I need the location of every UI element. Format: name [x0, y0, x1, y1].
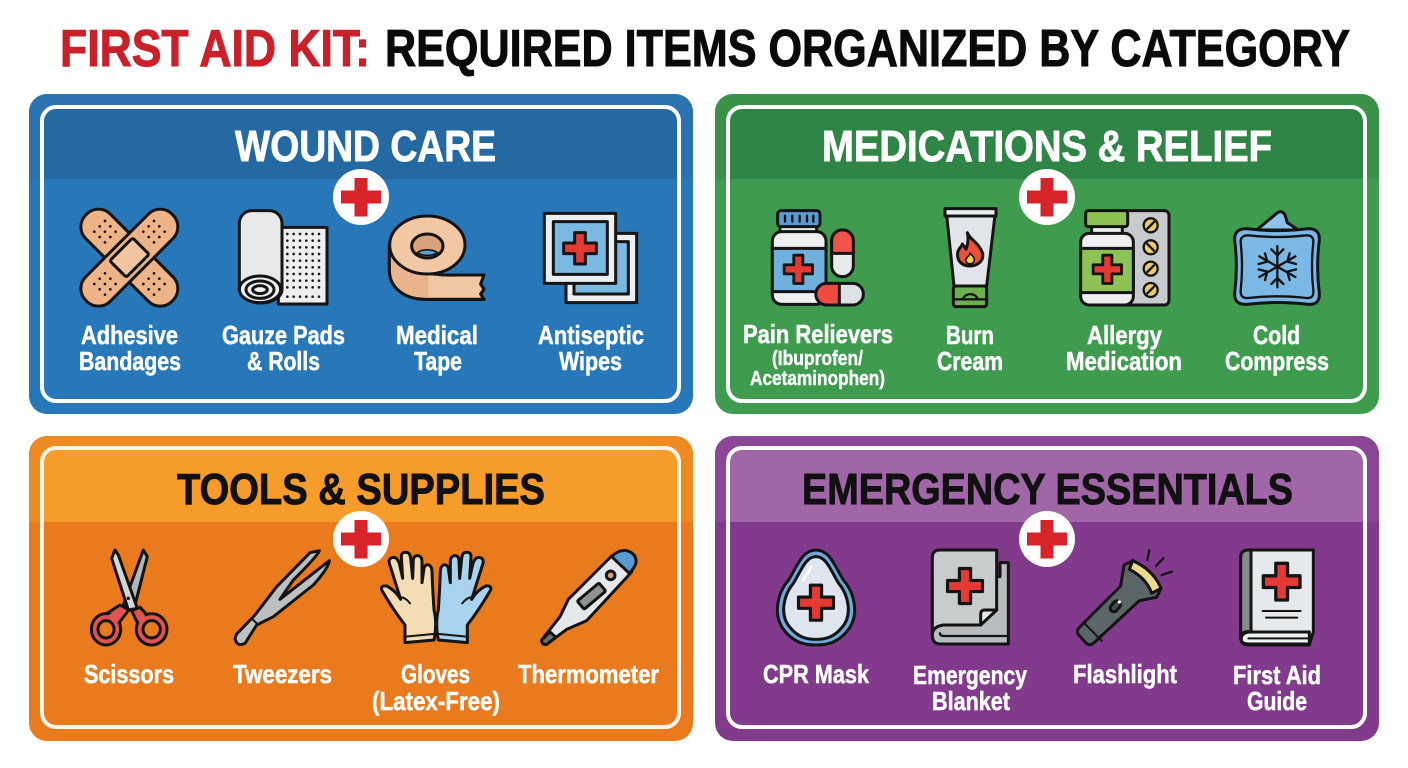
label: emergency blanket: Emergency	[913, 660, 1027, 690]
label: antiseptic wipes: Wipes	[559, 346, 622, 376]
icon: cpr mask	[777, 550, 855, 645]
label: cold compress: Cold	[1253, 320, 1300, 350]
label: burn cream	[937, 320, 1003, 376]
panel: tools and supplies	[29, 436, 693, 741]
label: gauze pads and rolls	[222, 320, 345, 376]
label: burn cream: Burn	[946, 320, 994, 350]
icon: scissors	[91, 550, 167, 645]
label: antiseptic wipes: Antiseptic	[538, 320, 644, 350]
icon: antiseptic wipes	[544, 213, 637, 303]
icon: tweezers	[235, 551, 329, 645]
icon: red cross badge	[333, 169, 389, 225]
icon: burn cream	[945, 209, 996, 307]
label: first aid guide	[1233, 660, 1321, 716]
heading: wound care: WOUND CARE	[235, 122, 496, 171]
icon: pain relievers	[772, 211, 863, 305]
icon: adhesive bandages	[74, 202, 185, 313]
label: emergency blanket	[913, 660, 1027, 716]
icon: flashlight	[1077, 550, 1172, 645]
heading: tools and supplies: TOOLS & SUPPLIES	[177, 465, 545, 514]
label: pain relievers: Pain Relievers	[743, 319, 893, 349]
icon: gauze pads and rolls	[239, 211, 327, 304]
label: pain relievers	[743, 319, 893, 390]
label: gloves latex-free: (Latex-Free)	[372, 686, 500, 716]
label: gloves latex-free: Gloves	[401, 659, 470, 689]
label: medical tape: Medical	[396, 320, 478, 350]
icon: red cross badge	[1019, 169, 1075, 225]
panel: medications and relief	[715, 94, 1379, 414]
label: pain relievers: (Ibuprofen/	[772, 348, 863, 370]
label: gauze pads and rolls: Gauze Pads	[222, 320, 345, 350]
label: medical tape	[396, 320, 478, 376]
label: tweezers: Tweezers	[233, 659, 332, 689]
icon: red cross badge	[333, 511, 389, 567]
title: FIRST AID KIT:	[60, 20, 370, 78]
label: antiseptic wipes	[538, 320, 644, 376]
label: gauze pads and rolls: & Rolls	[247, 346, 320, 376]
icon: red cross badge	[1019, 511, 1075, 567]
label: adhesive bandages: Adhesive	[81, 320, 178, 350]
label: allergy medication: Medication	[1066, 346, 1182, 376]
label: burn cream: Cream	[937, 346, 1003, 376]
label: cpr mask: CPR Mask	[763, 659, 869, 689]
label: emergency blanket: Blanket	[932, 686, 1010, 716]
label: cold compress	[1225, 320, 1329, 376]
panel: wound care	[29, 94, 693, 414]
label: gloves latex-free	[372, 659, 500, 716]
label: first aid guide: Guide	[1247, 686, 1307, 716]
label: adhesive bandages	[79, 320, 181, 376]
label: scissors: Scissors	[84, 659, 174, 689]
label: cold compress: Compress	[1225, 346, 1329, 376]
icon: gloves	[382, 552, 491, 643]
heading: emergency essentials: EMERGENCY ESSENTIALS	[802, 465, 1293, 514]
label: allergy medication	[1066, 320, 1182, 376]
icon: thermometer	[542, 550, 636, 644]
label: flashlight: Flashlight	[1073, 659, 1177, 689]
label: pain relievers: Acetaminophen)	[750, 368, 885, 390]
heading: medications and relief: MEDICATIONS & RELIEF	[822, 122, 1272, 171]
label: allergy medication: Allergy	[1087, 320, 1162, 350]
icon: emergency blanket	[932, 550, 1008, 644]
label: first aid guide: First Aid	[1233, 660, 1321, 690]
icon: first aid guide	[1241, 550, 1313, 645]
label: medical tape: Tape	[414, 346, 462, 376]
label: thermometer: Thermometer	[518, 659, 659, 689]
icon: allergy medication	[1081, 211, 1169, 305]
label: adhesive bandages: Bandages	[79, 346, 181, 376]
panel: emergency essentials	[715, 436, 1379, 741]
icon: medical tape	[389, 216, 484, 299]
icon: cold compress	[1235, 212, 1319, 304]
